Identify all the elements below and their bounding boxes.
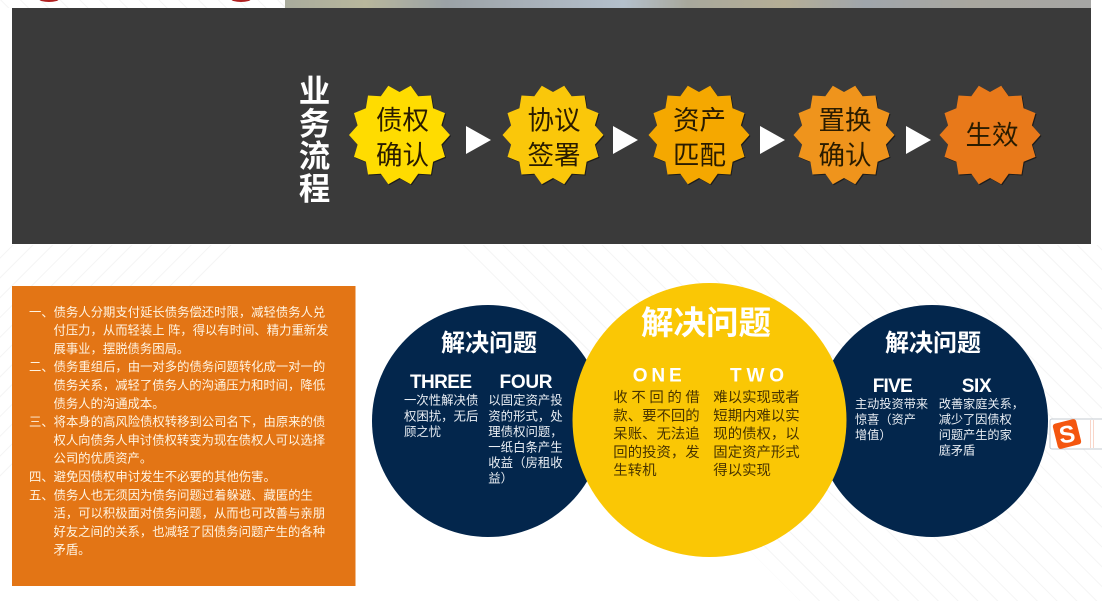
step 3: 资产匹配: 匹配 (673, 140, 726, 170)
heading: 业务流程 (299, 73, 330, 206)
circle: one and two: 解决问题 (641, 305, 771, 341)
circle: three and four: 收益（房租收 (488, 455, 563, 470)
benefits text: 四、避免因债权申讨发生不必要的其他伤害。 (29, 469, 276, 484)
panel: business process band (12, 8, 1091, 244)
circle: one and two: 收不回的借 (613, 389, 700, 406)
heading: 业务流程: 业 (299, 73, 330, 109)
circle: three and four: 理债权问题， (488, 424, 563, 439)
circle: one and two: 短期内难以实 (713, 407, 800, 424)
step 3: 资产匹配 (648, 86, 750, 185)
step 1: 债权确认: 债权 (376, 106, 429, 136)
circle: one and two: ONE (633, 366, 682, 386)
step 2: 协议签署: 签署 (528, 140, 580, 170)
benefits text: 公司的优质资产。 (54, 451, 152, 466)
circle: five and six: 减少了因债权 (939, 412, 1012, 426)
circle: three and four: 资的形式，处 (488, 408, 563, 423)
circle: one and two: TWO (730, 366, 784, 386)
circle: one and two (572, 283, 846, 557)
circle: one and two: 款、要不回的 (613, 407, 700, 424)
circle: three and four: 益） (488, 472, 513, 486)
step 1: 债权确认 (349, 86, 451, 185)
circle: five and six: 解决问题 (885, 330, 981, 357)
benefits text: 付压力，从而轻装上 阵，得以有时间、精力重新发 (54, 323, 328, 338)
step 2: 协议签署: 协议 (528, 106, 580, 136)
benefits text: 展事业，摆脱债务困局。 (54, 341, 189, 356)
benefits text: 好友之间的关系，也减轻了因债务问题产生的各种 (54, 524, 325, 539)
circle: three and four: 以固定资产投 (488, 393, 563, 408)
benefits text: 一、债务人分期支付延长债务偿还时限，减轻债务人兑 (29, 304, 325, 319)
circle: five and six: 改善家庭关系， (939, 396, 1024, 411)
circle: three and four: THREE (410, 372, 472, 393)
circle: five and six: SIX (962, 376, 992, 397)
circle: one and two: 呆账、无法追 (613, 426, 700, 443)
benefits text: 债务关系，减轻了债务人的沟通压力和时间，降低 (54, 378, 325, 392)
benefits text: 权人向债务人申讨债权转变为现在债权人可以选择 (54, 432, 326, 447)
arrow 4 (906, 126, 931, 154)
top photo strip (285, 0, 1091, 8)
circle: five and six: 庭矛盾 (939, 442, 975, 458)
heading: 业务流程: 流 (299, 138, 330, 174)
step 2: 协议签署 (502, 86, 604, 185)
circle: one and two: 得以实现 (713, 462, 771, 479)
step 4: 置换确认: 置换 (818, 106, 872, 136)
panel: benefits list (12, 286, 356, 586)
arrow 3 (760, 126, 785, 154)
benefits text: 三、将本身的高风险债权转移到公司名下，由原来的债 (29, 414, 325, 429)
benefits text: 矛盾。 (54, 543, 91, 557)
benefits text (29, 304, 328, 557)
heading: 业务流程: 务 (299, 106, 330, 142)
circle: five and six: 增值） (855, 427, 892, 442)
step 1: 债权确认: 确认 (376, 140, 429, 170)
circle: three and four: 顾之忧 (404, 425, 441, 439)
circle: five and six: FIVE (873, 376, 913, 397)
circle: one and two: 现的债权，以 (713, 426, 800, 443)
circle: five and six: 问题产生的家 (939, 427, 1012, 442)
icon: input method toolbar: S (1057, 421, 1077, 449)
step 4: 置换确认: 确认 (818, 140, 872, 170)
arrow 1 (466, 126, 491, 154)
circle: five and six (816, 305, 1048, 537)
circle: three and four: 权困扰，无后 (404, 408, 478, 423)
circle: one and two: 生转机 (613, 462, 657, 479)
circle: three and four: 解决问题 (441, 330, 537, 357)
benefits text: 二、债务重组后，由一对多的债务问题转化成一对一的 (29, 359, 325, 374)
circle: one and two: 固定资产形式 (713, 444, 800, 461)
icon: input method toolbar (1050, 418, 1102, 450)
benefits text: 五、债务人也无须因为债务问题过着躲避、藏匿的生 (29, 487, 313, 502)
arrow 2 (613, 126, 638, 154)
circle: three and four: FOUR (500, 372, 553, 393)
step 5: 生效 (940, 86, 1042, 185)
circle: five and six: 主动投资带来 (855, 396, 928, 411)
red arc fragments at top edge (39, 0, 251, 2)
circle: one and two: 难以实现或者 (713, 389, 800, 406)
heading: 业务流程: 程 (299, 170, 330, 206)
step 5: 生效: 生效 (966, 120, 1018, 150)
circle: three and four (372, 305, 604, 537)
circle: one and two: 回的投资，发 (613, 444, 700, 461)
benefits text: 活，可以积极面对债务问题，从而也可改善与亲朋 (54, 506, 325, 521)
circle: three and four: 一纸白条产生 (488, 440, 563, 454)
step 3: 资产匹配: 资产 (673, 106, 726, 136)
circle: five and six: 惊喜（资产 (855, 412, 916, 426)
circle: three and four: 一次性解决债 (404, 394, 478, 408)
step 4: 置换确认 (794, 86, 896, 185)
benefits text: 债务人的沟通成本。 (54, 396, 165, 411)
